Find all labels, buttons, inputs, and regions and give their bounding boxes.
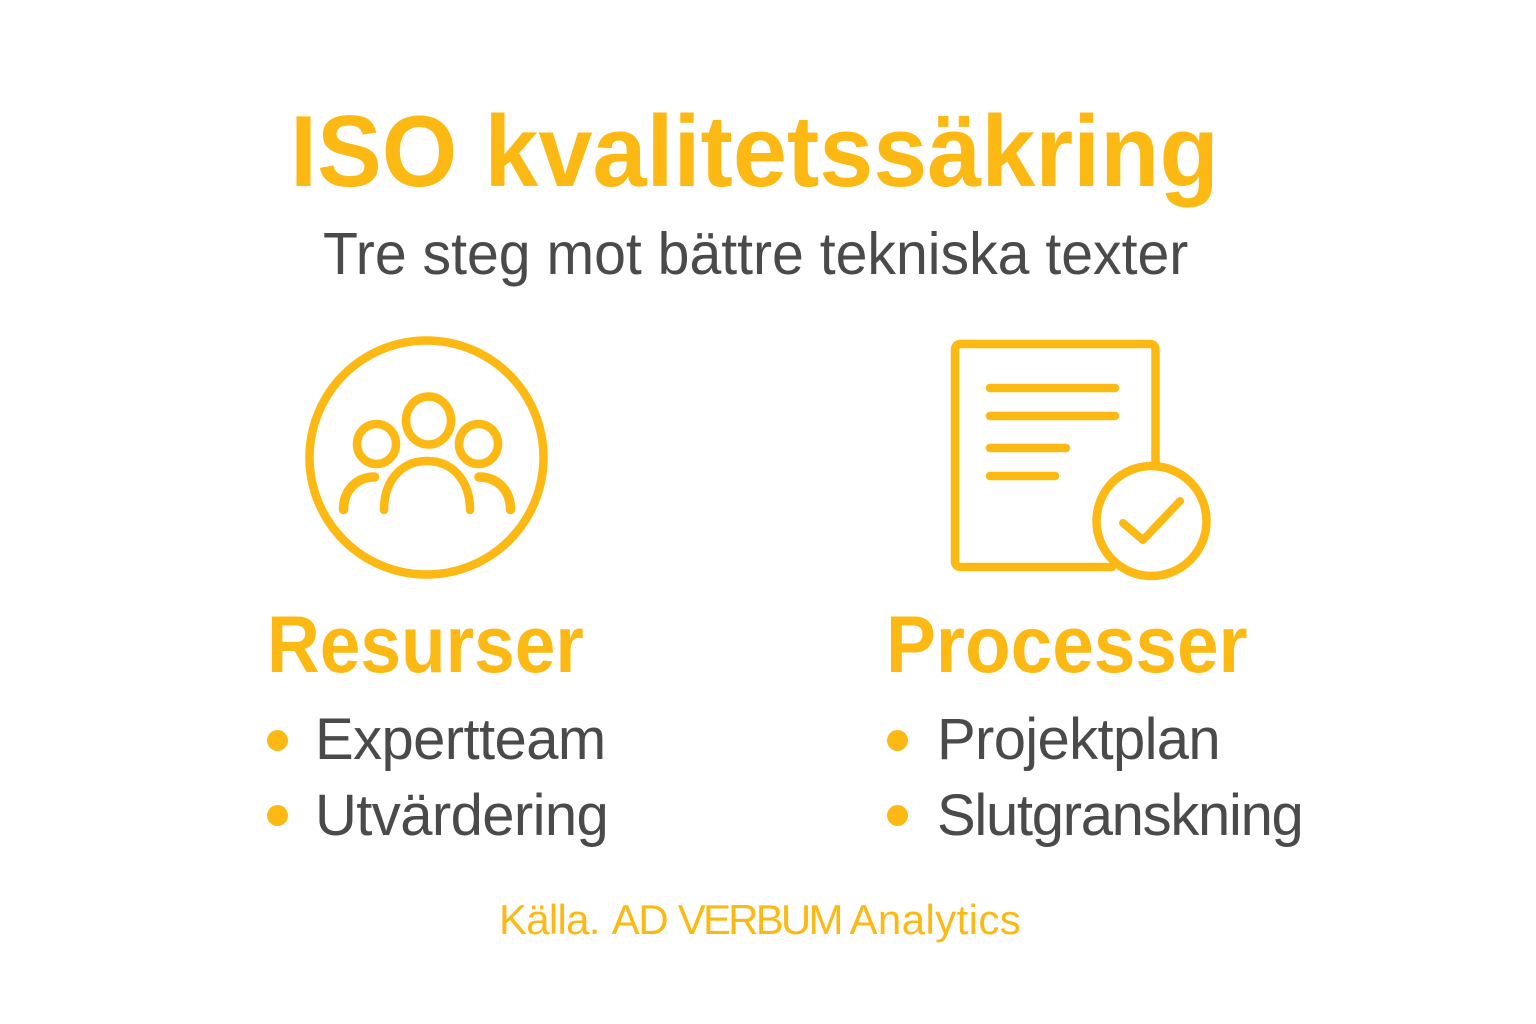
heading: Processer: Processer <box>886 600 1248 690</box>
bullet: Expertteam <box>267 730 288 751</box>
text: Slutgranskning: Slutgranskning <box>937 783 1302 848</box>
panel: Processer <box>886 600 1302 848</box>
text: Expertteam: Expertteam <box>315 707 606 772</box>
title: ISO kvalitetssäkring <box>290 96 1219 208</box>
bullet: Utvärdering <box>267 805 288 826</box>
bullet: Slutgranskning <box>887 805 908 826</box>
source note: Källa. AD VERBUM Analytics <box>499 896 1021 943</box>
icon: people in circle <box>305 336 548 579</box>
heading: Resurser: Resurser <box>267 600 584 690</box>
subtitle: Tre steg mot bättre tekniska texter <box>323 221 1188 287</box>
text: Utvärdering: Utvärdering <box>315 783 608 848</box>
icon: document with check <box>950 340 1211 580</box>
text: Projektplan: Projektplan <box>937 707 1220 772</box>
panel: Resurser <box>267 600 608 848</box>
bullet: Projektplan <box>887 730 908 751</box>
